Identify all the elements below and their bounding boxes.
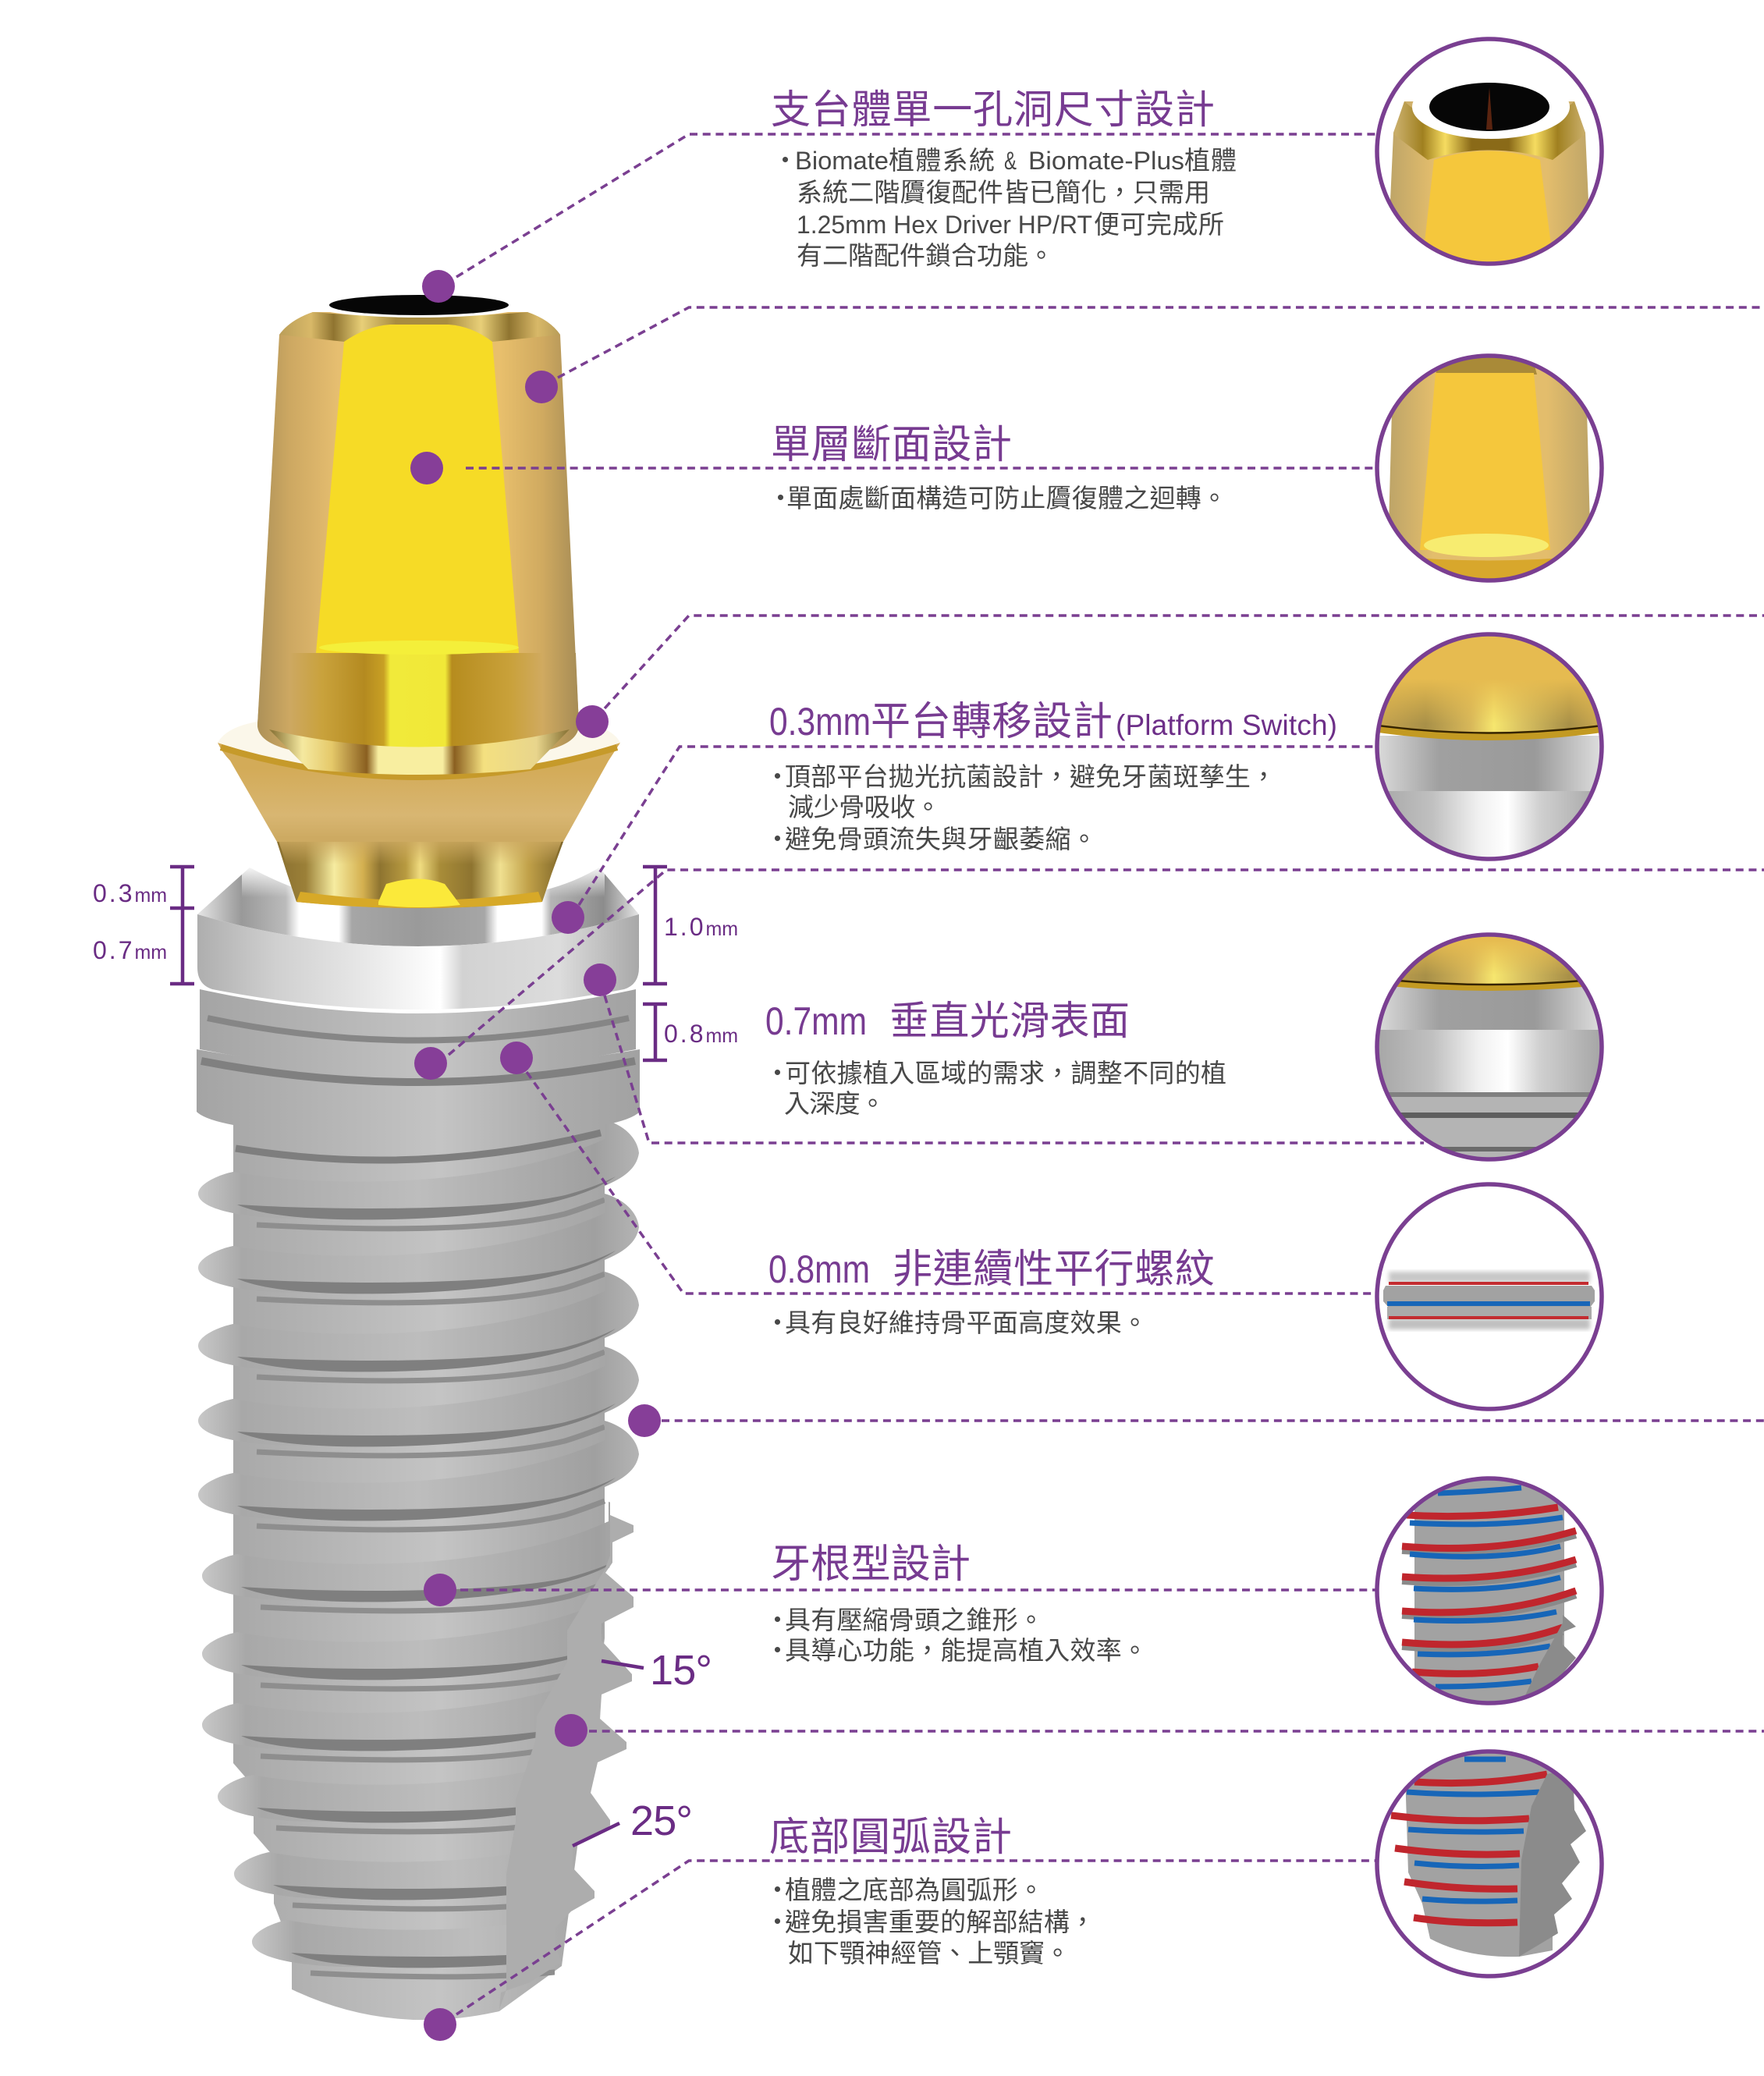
text block: single hole abutment: Biomate	[795, 147, 889, 175]
text block: platform switch: 頂部平台拋光抗菌設計，避免牙菌斑孳生，	[785, 762, 1276, 791]
text block: rounded apex: 如下顎神經管、上顎竇。	[788, 1939, 1070, 1968]
text block: rounded apex	[765, 1815, 1095, 1968]
implant silver collar	[197, 862, 639, 1010]
text block: platform switch: (Platform Switch)	[1116, 709, 1337, 741]
callout: collar line	[414, 870, 1764, 1080]
text block: single hole abutment: &	[1004, 147, 1017, 175]
callout: flange line	[576, 616, 1764, 738]
callout: platform switch	[552, 747, 1377, 934]
callout: abutment hole	[422, 134, 1377, 303]
angle: 15 degrees	[602, 1647, 712, 1694]
callout: single flat	[410, 452, 1377, 484]
text block: single hole abutment: 便可完成所	[1094, 210, 1224, 239]
text block: single hole abutment: 植體系統	[889, 146, 995, 175]
text block: micro thread: 非連續性平行螺紋	[893, 1247, 1215, 1291]
text block: root form: ‧	[765, 1606, 790, 1634]
text block: platform switch: 0.3mm	[769, 700, 871, 743]
inset: root form	[1377, 1474, 1602, 1712]
inset: abutment hole	[1377, 39, 1602, 269]
callout: micro thread	[500, 1042, 1375, 1294]
text block: rounded apex: ‧	[765, 1875, 790, 1904]
text block: smooth surface: 入深度。	[784, 1089, 886, 1118]
text block: root form: 牙根型設計	[771, 1542, 971, 1586]
text block: single hole abutment: 系統二階贗復配件皆已簡化，只需用	[797, 178, 1210, 207]
text block: root form: ‧	[765, 1636, 790, 1665]
callout: smooth surface	[584, 963, 1424, 1143]
text block: single hole abutment: ‧	[772, 146, 798, 175]
text block: micro thread: 具有良好維持骨平面高度效果。	[785, 1308, 1148, 1337]
text block: platform switch	[765, 699, 1337, 853]
inset: micro thread	[1377, 1184, 1602, 1409]
callout: thread line	[628, 1404, 1764, 1437]
text block: platform switch: ‧	[765, 825, 790, 853]
abutment screw hole	[311, 293, 527, 318]
text block: smooth surface: 可依據植入區域的需求，調整不同的植	[785, 1059, 1226, 1088]
text block: single flat: 單面處斷面構造可防止贗復體之迴轉。	[786, 484, 1227, 513]
inset: rounded apex	[1377, 1748, 1602, 1976]
text block: micro thread: ‧	[765, 1308, 790, 1337]
text block: micro thread	[765, 1247, 1215, 1337]
callout: side cut line	[555, 1714, 1764, 1747]
text block: root form: 具導心功能，能提高植入效率。	[785, 1636, 1148, 1665]
text block: smooth surface: 垂直光滑表面	[889, 999, 1130, 1043]
text block: platform switch: 避免骨頭流失與牙齦萎縮。	[785, 825, 1097, 853]
text block: platform switch: 減少骨吸收。	[788, 793, 941, 822]
dimension: 0.8mm	[643, 1004, 738, 1060]
angle: 25 degrees: 25°	[630, 1797, 693, 1844]
angle: 25 degrees	[573, 1797, 693, 1846]
text block: single hole abutment: 植體	[1184, 146, 1237, 175]
abutment upper body	[257, 312, 579, 775]
text block: single hole abutment	[771, 87, 1237, 270]
callout: root form	[424, 1574, 1377, 1606]
text block: rounded apex: ‧	[765, 1907, 790, 1936]
text block: single flat	[768, 422, 1227, 513]
callout: upper right side line	[525, 307, 1764, 403]
text block: smooth surface: 0.7mm	[765, 999, 867, 1043]
callout: rounded apex	[424, 1861, 1377, 2041]
dimension: 0.3mm and 0.7mm: 0.3mm	[93, 879, 167, 907]
text block: single hole abutment: Biomate-Plus	[1028, 147, 1184, 175]
text block: rounded apex: 底部圓弧設計	[769, 1815, 1012, 1859]
text block: platform switch: ‧	[765, 762, 790, 791]
dimension: 1.0mm	[643, 867, 738, 984]
dimension: 0.8mm: 0.8mm	[664, 1020, 738, 1048]
text block: single hole abutment: 1.25mm Hex Driver HP/RT	[797, 211, 1092, 239]
text block: rounded apex: 植體之底部為圓弧形。	[785, 1875, 1044, 1904]
text block: micro thread: 0.8mm	[768, 1247, 870, 1291]
text block: root form: 具有壓縮骨頭之錐形。	[785, 1606, 1044, 1634]
implant micro threads	[197, 989, 640, 1160]
text block: smooth surface	[765, 999, 1226, 1118]
abutment cone and flange	[218, 722, 620, 908]
text block: rounded apex: 避免損害重要的解部結構，	[785, 1907, 1095, 1936]
text block: single flat: 單層斷面設計	[771, 422, 1012, 467]
text block: single hole abutment: 有二階配件鎖合功能。	[797, 241, 1054, 270]
dimension: 1.0mm: 1.0mm	[664, 913, 738, 941]
text block: platform switch: 平台轉移設計	[871, 699, 1113, 743]
inset: platform switch	[1373, 628, 1607, 865]
text block: root form	[765, 1542, 1148, 1665]
dimension: 0.3mm and 0.7mm	[93, 867, 194, 984]
text block: single hole abutment: 支台體單一孔洞尺寸設計	[771, 87, 1215, 132]
text block: single flat: ‧	[768, 484, 793, 513]
inset: smooth surface	[1373, 928, 1607, 1161]
implant illustration	[197, 295, 640, 2021]
angle: 15 degrees: 15°	[650, 1647, 712, 1694]
implant threaded body	[198, 1123, 639, 2021]
text block: smooth surface: ‧	[765, 1059, 790, 1088]
inset: single flat	[1377, 351, 1602, 585]
dimension: 0.3mm and 0.7mm: 0.7mm	[93, 936, 167, 964]
